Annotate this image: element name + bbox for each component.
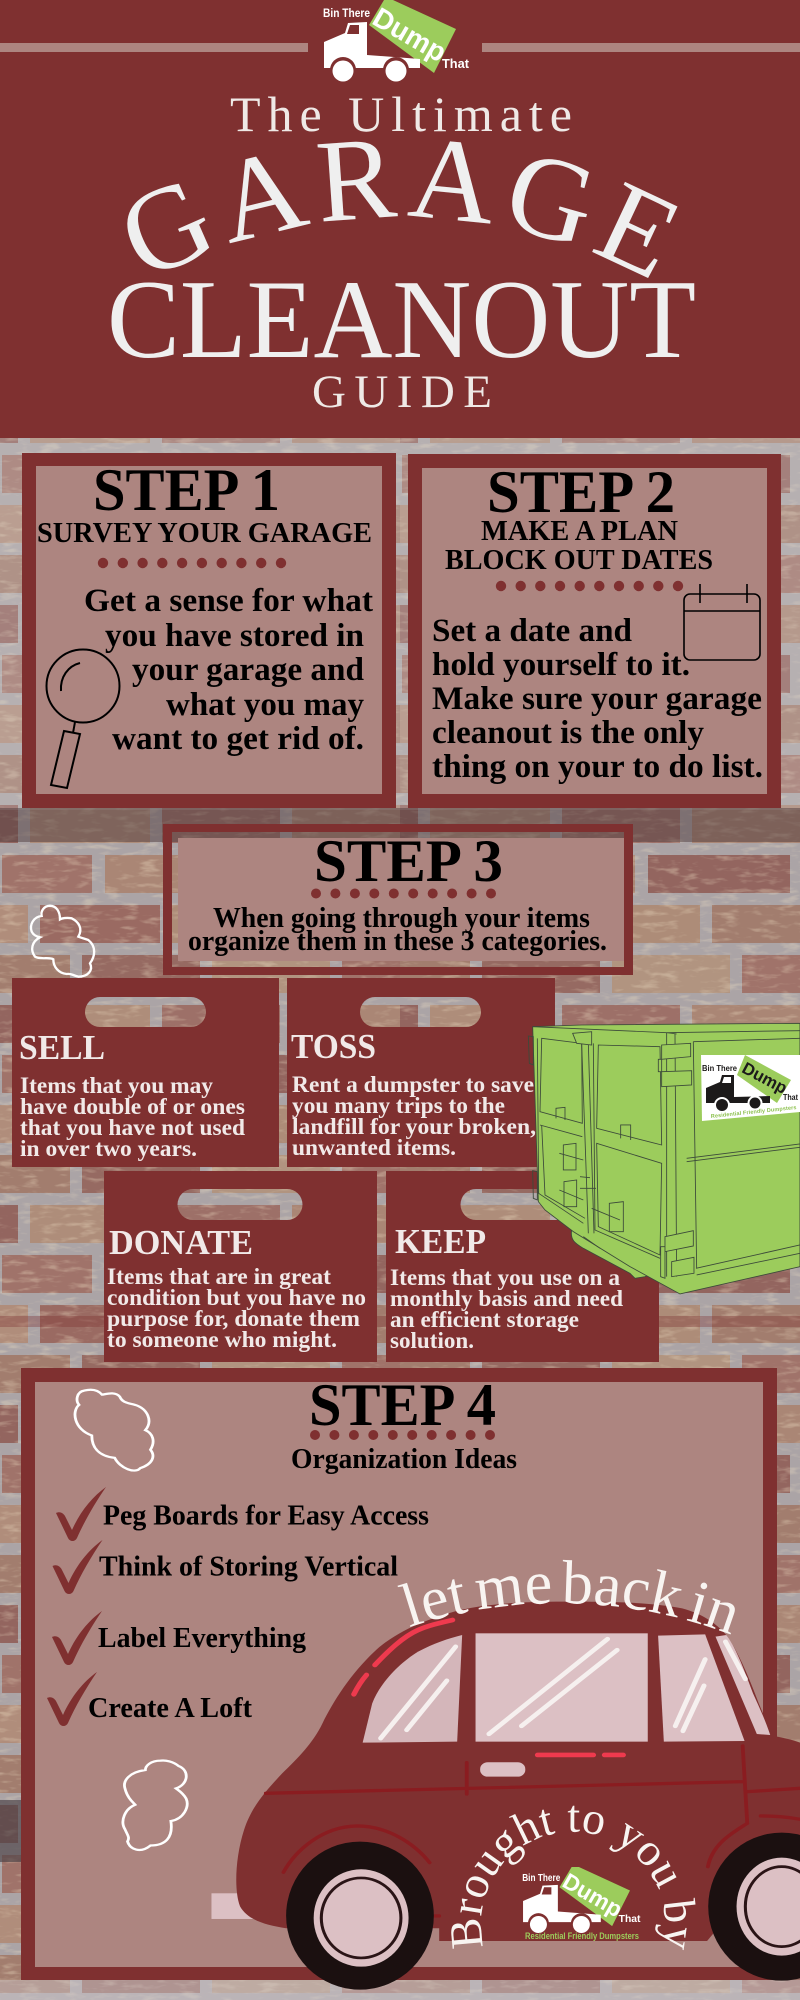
item: create a loft: Create A Loft bbox=[88, 1692, 252, 1724]
body text: hold yourself to it. bbox=[432, 647, 690, 683]
intro text bbox=[188, 903, 607, 957]
subheading: survey your garage: SURVEY YOUR GARAGE bbox=[37, 518, 372, 549]
card: keep: an efficient storage bbox=[390, 1307, 579, 1332]
panel: step 3 bbox=[163, 824, 633, 975]
checklist bbox=[47, 1487, 429, 1726]
body text: thing on your to do list. bbox=[432, 749, 763, 785]
title: CLEANOUT: CLEANOUT bbox=[107, 258, 696, 382]
title: GUIDE: GUIDE bbox=[312, 366, 492, 418]
header banner bbox=[0, 0, 800, 438]
curved text: let me back in: let me back in bbox=[398, 1560, 735, 1634]
card: toss: you many trips to the bbox=[292, 1093, 505, 1118]
body text: want to get rid of. bbox=[112, 721, 364, 757]
dotted divider bbox=[98, 558, 286, 568]
card: keep: KEEP bbox=[395, 1222, 486, 1261]
icon: calendar bbox=[684, 584, 760, 660]
subheading: make a plan block out dates bbox=[445, 516, 713, 576]
card: toss bbox=[287, 978, 555, 1167]
icon: magnifying glass bbox=[46, 650, 120, 788]
dotted divider bbox=[311, 888, 496, 898]
dumpster logo sticker: Residential Friendly Dumpsters bbox=[711, 1105, 797, 1120]
title: GARAGE (curved) bbox=[127, 141, 678, 278]
card: sell: that you have not used bbox=[20, 1115, 245, 1140]
title: GARAGE (curved): GARAGE bbox=[127, 141, 678, 278]
decorative cloud outline bbox=[31, 906, 94, 977]
item: peg boards: Peg Boards for Easy Access bbox=[103, 1500, 429, 1532]
illustration: green dumpster bbox=[528, 1023, 800, 1294]
body text: Make sure your garage bbox=[432, 681, 762, 717]
panel: step 2 bbox=[408, 454, 781, 808]
card: toss: unwanted items. bbox=[292, 1135, 456, 1160]
body text: your garage and bbox=[132, 652, 364, 688]
card: sell bbox=[12, 978, 279, 1167]
body text: what you may bbox=[166, 687, 364, 723]
dumpster logo sticker: Bin There bbox=[702, 1064, 738, 1073]
subheading: make a plan block out dates: MAKE A PLAN bbox=[481, 516, 678, 547]
card: toss: landfill for your broken, bbox=[292, 1114, 536, 1139]
card: donate: condition but you have no bbox=[107, 1285, 366, 1310]
card: sell: Items that you may bbox=[20, 1073, 213, 1098]
item: create a loft bbox=[47, 1672, 252, 1726]
card: toss: TOSS bbox=[291, 1027, 376, 1066]
dotted divider bbox=[310, 1430, 495, 1440]
cloud outline bottom bbox=[123, 1760, 187, 1850]
body text: Set a date and bbox=[432, 613, 632, 649]
card: sell: have double of or ones bbox=[20, 1094, 245, 1119]
logo on car door: Bin There bbox=[522, 1873, 561, 1884]
card: donate: DONATE bbox=[109, 1223, 253, 1262]
panel: step 1 bbox=[22, 453, 396, 808]
card: donate: purpose for, donate them bbox=[107, 1306, 360, 1331]
logo on car door bbox=[522, 1867, 641, 1941]
dumpster logo sticker bbox=[701, 1055, 800, 1121]
heading: step 2: STEP 2 bbox=[487, 459, 675, 525]
dotted divider bbox=[496, 581, 683, 591]
cloud outline top bbox=[75, 1390, 153, 1471]
illustration: red car bbox=[212, 1560, 800, 1990]
logo on car door: Residential Friendly Dumpsters bbox=[525, 1931, 639, 1941]
item: label everything: Label Everything bbox=[98, 1622, 306, 1654]
curved text: brought to you by: Brought to you by bbox=[451, 1806, 696, 1950]
card: keep: Items that you use on a bbox=[390, 1265, 621, 1290]
logo on car door: Dump bbox=[558, 1868, 627, 1922]
body text: Get a sense for what bbox=[84, 583, 373, 619]
body text bbox=[432, 613, 763, 785]
card: donate: to someone who might. bbox=[107, 1327, 337, 1352]
logo: Bin There Dump That bbox=[323, 0, 470, 83]
title: The Ultimate: The Ultimate bbox=[230, 86, 572, 142]
heading: step 4: STEP 4 bbox=[309, 1372, 496, 1438]
card: keep: solution. bbox=[390, 1328, 474, 1353]
card: donate: Items that are in great bbox=[107, 1264, 331, 1289]
brick wall background bbox=[0, 438, 800, 2000]
item: peg boards bbox=[56, 1487, 429, 1541]
dumpster logo sticker: Dump bbox=[739, 1058, 790, 1098]
logo: Bin There Dump That: That bbox=[442, 56, 470, 71]
dumpster logo sticker: That bbox=[783, 1093, 798, 1102]
item: think vertical: Think of Storing Vertical bbox=[99, 1550, 398, 1582]
card: sell: SELL bbox=[19, 1028, 105, 1067]
logo: Bin There Dump That: Dump bbox=[368, 2, 452, 68]
intro text: When going through your items bbox=[213, 903, 590, 934]
card: toss: Rent a dumpster to save bbox=[292, 1072, 534, 1097]
logo on car door: That bbox=[619, 1913, 641, 1925]
subheading: organization ideas: Organization Ideas bbox=[291, 1443, 517, 1475]
body text: you have stored in bbox=[105, 618, 364, 654]
card: keep bbox=[386, 1171, 659, 1362]
intro text: organize them in these 3 categories. bbox=[188, 926, 607, 957]
card: keep: monthly basis and need bbox=[390, 1286, 623, 1311]
panel: step 4 bbox=[21, 1368, 777, 1980]
heading: step 3: STEP 3 bbox=[314, 828, 503, 894]
logo: Bin There Dump That: Bin There bbox=[323, 6, 370, 20]
card: donate bbox=[104, 1171, 377, 1362]
item: think vertical bbox=[52, 1540, 398, 1594]
body text bbox=[84, 583, 373, 757]
card: sell: in over two years. bbox=[20, 1136, 197, 1161]
item: label everything bbox=[52, 1611, 306, 1665]
heading: step 1: STEP 1 bbox=[93, 457, 280, 523]
subheading: make a plan block out dates: BLOCK OUT DATES bbox=[445, 545, 713, 576]
body text: cleanout is the only bbox=[432, 715, 704, 751]
